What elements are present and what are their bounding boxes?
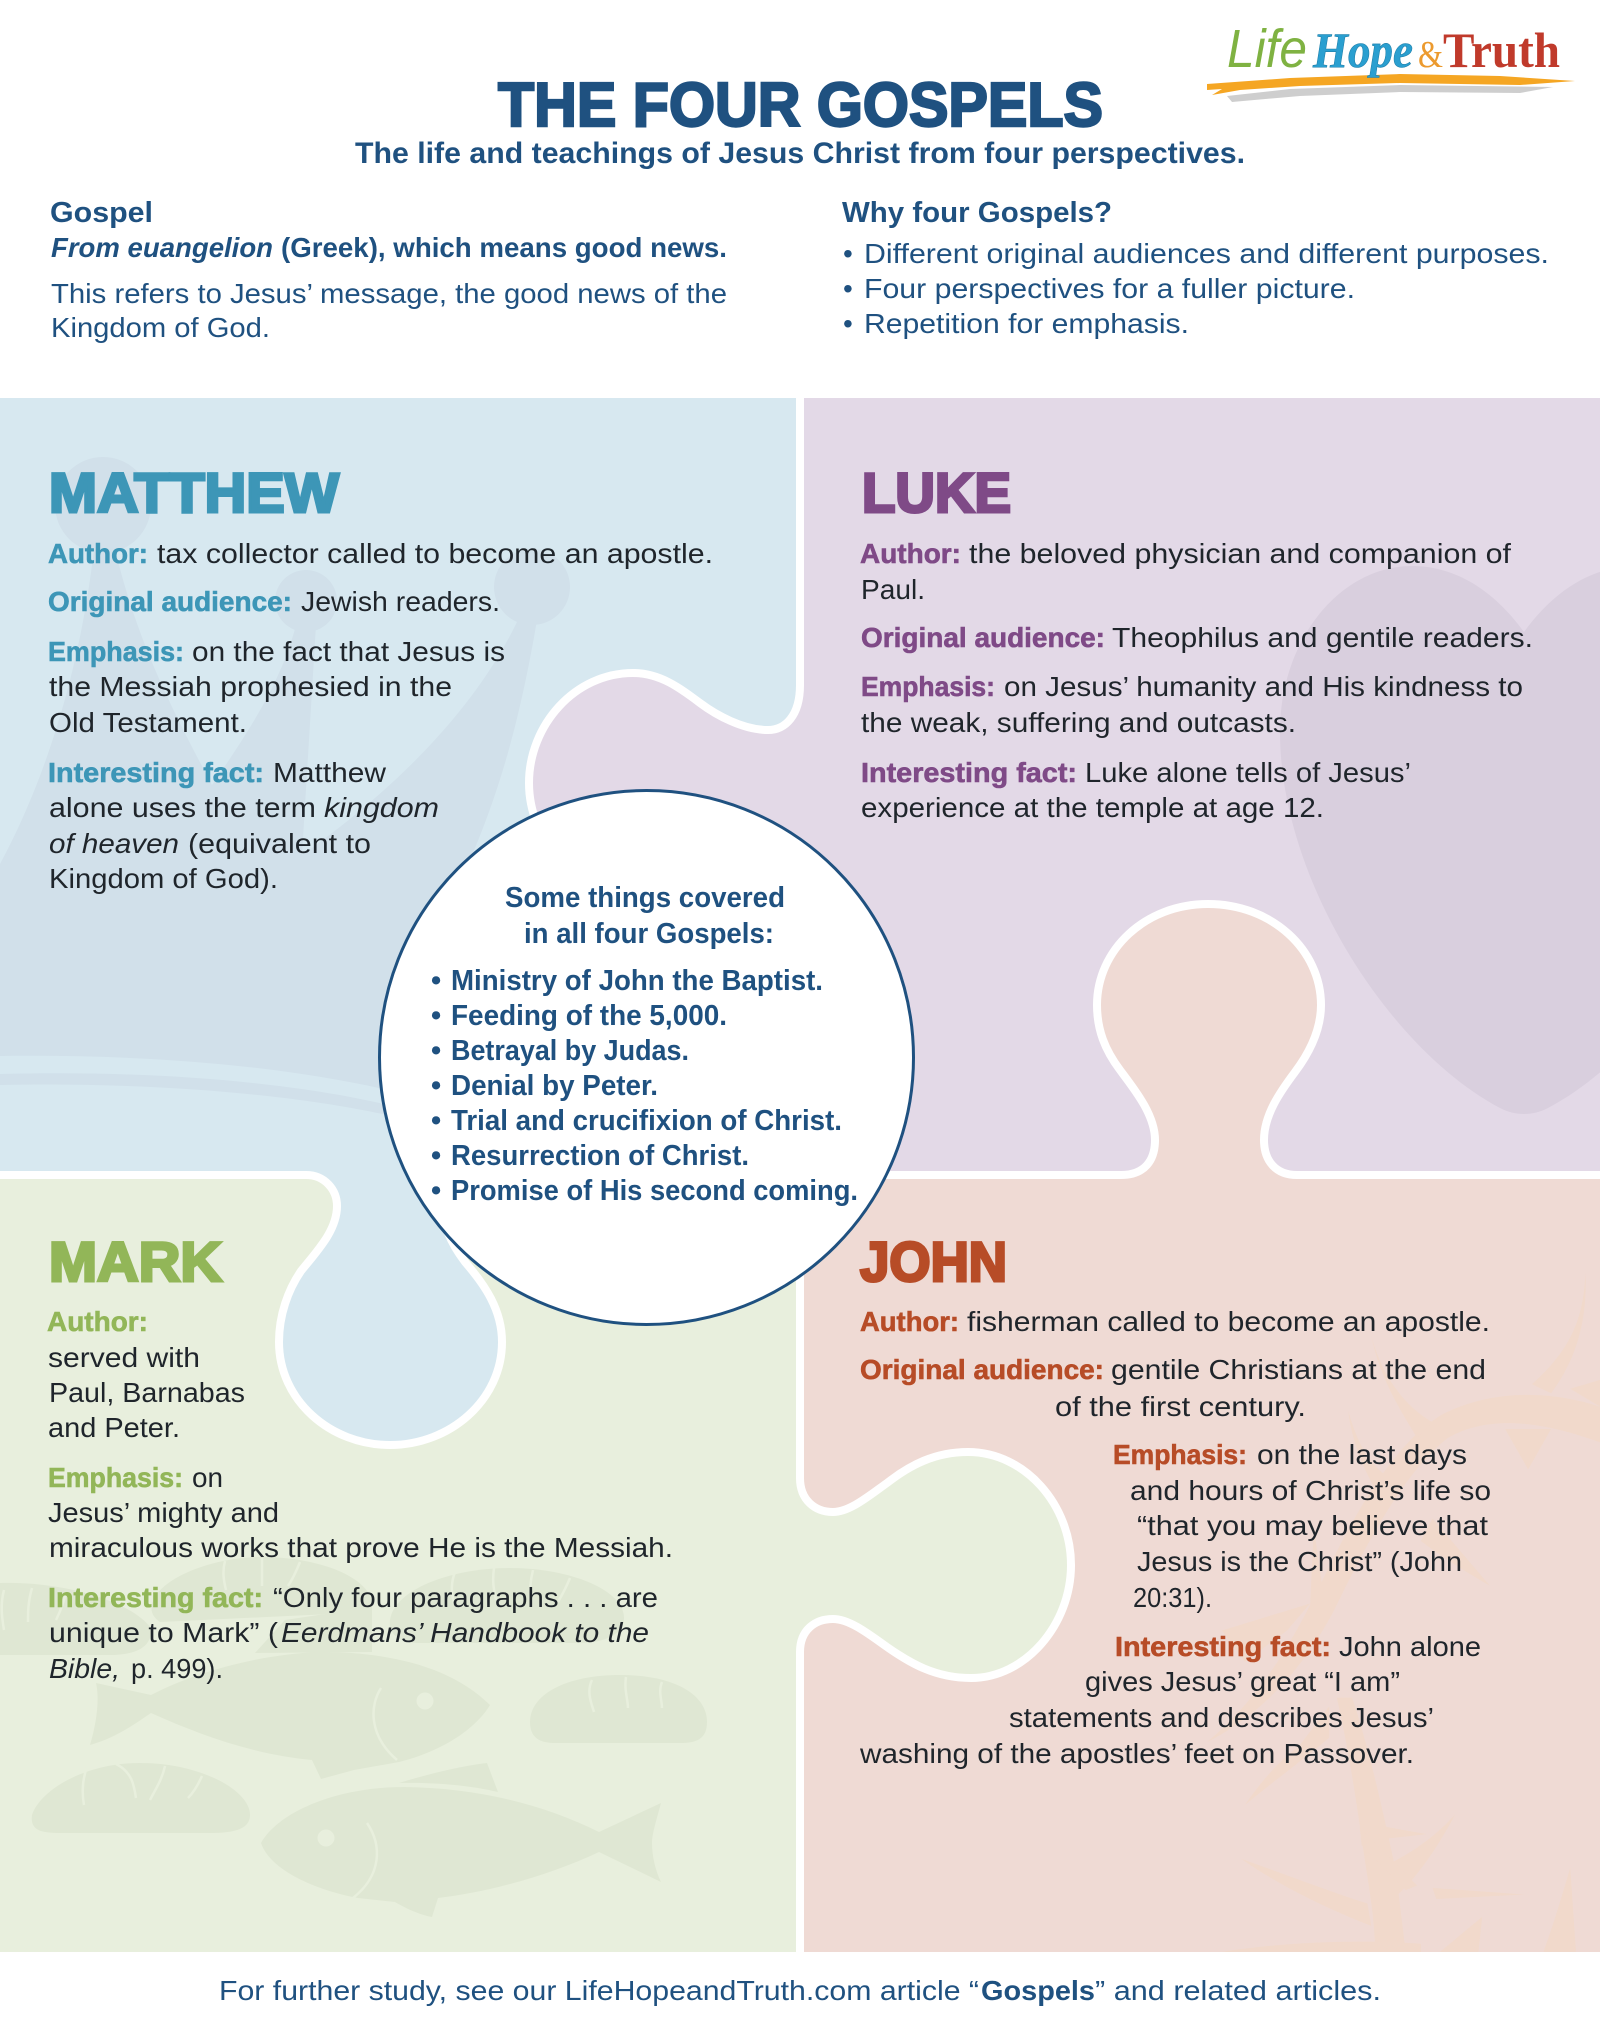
puzzle tab: Mark into John [800, 1452, 1071, 1678]
text: John: Author: [860, 1306, 959, 1337]
text: John: of the first century. [1055, 1391, 1306, 1422]
text: Matthew: Original audience: [48, 586, 292, 617]
text: Matthew: alone uses the term [49, 792, 316, 823]
text: John: 20:31). [1133, 1582, 1212, 1613]
center circle: things covered in all four Gospels: Feeding of the 5,000. [451, 1000, 727, 1032]
text: Mark: served with [48, 1342, 200, 1373]
text: Mark: Interesting fact: [48, 1582, 263, 1613]
text: Matthew: Matthew [273, 757, 387, 788]
footer: Gospels [981, 1975, 1095, 2006]
center circle: things covered in all four Gospels: • [431, 1070, 441, 1102]
text: Mark: “Only four paragraphs . . . are [273, 1582, 658, 1613]
center circle: things covered in all four Gospels: • [431, 1105, 441, 1137]
text: Matthew [48, 461, 713, 894]
center circle: things covered in all four Gospels: • [431, 965, 441, 997]
text: John: statements and describes Jesus’ [1009, 1702, 1434, 1733]
text block: Why four Gospels: • [843, 273, 853, 304]
text: Matthew: Jewish readers. [301, 586, 500, 617]
text: Matthew: Interesting fact: [48, 757, 264, 788]
text: Mark: unique to Mark” ( [49, 1617, 279, 1648]
text: Mark: and Peter. [48, 1412, 180, 1443]
text block: Why four Gospels: • [843, 308, 853, 339]
text block: Gospel definition: Gospel [50, 197, 153, 229]
text: John: washing of the apostles’ feet on Passover. [859, 1738, 1414, 1769]
text: Matthew: kingdom [324, 792, 439, 823]
icon: bread far left [0, 1583, 151, 1655]
text: Luke: Interesting fact: [861, 757, 1077, 788]
text: John: gives Jesus’ great “I am” [1085, 1666, 1400, 1697]
title: THE FOUR GOSPELS [498, 71, 1103, 140]
text block: Why four Gospels: Different original audiences and different purposes. [864, 238, 1549, 269]
heading: John: JOHN [860, 1230, 1007, 1293]
text block: Why four Gospels: Four perspectives for a fuller picture. [864, 273, 1355, 304]
icon: bread lower left [32, 1763, 250, 1833]
heading: Mark: MARK [49, 1230, 222, 1293]
text: Mark: Paul, Barnabas [49, 1377, 245, 1408]
text: Matthew: Old Testament. [49, 707, 247, 738]
text: John: Original audience: [860, 1354, 1104, 1385]
text block: Why four Gospels: • [843, 238, 853, 269]
text block: Why four Gospels: Repetition for emphasis. [864, 308, 1189, 339]
icon: fish upper [90, 1607, 490, 1779]
panel: Matthew background with crown [0, 398, 800, 1175]
center circle: things covered in all four Gospels: • [431, 1175, 441, 1207]
puzzle tab: John into Luke [1097, 904, 1321, 1176]
text: John: fisherman called to become an apostle. [967, 1306, 1490, 1337]
text: Mark: p. 499). [131, 1653, 223, 1684]
panel: Luke background with heart [800, 398, 1600, 1175]
text: John: Jesus is the Christ” (John [1137, 1546, 1462, 1577]
text: Luke: the weak, suffering and outcasts. [861, 707, 1296, 738]
logo: Life Hope & Truth: Hope [1312, 22, 1413, 78]
text: John: “that you may believe that [1137, 1510, 1488, 1541]
center circle: things covered in all four Gospels: Ministry of John the Baptist. [451, 965, 823, 997]
text: Mark: Bible, [49, 1653, 120, 1684]
text: Luke: Luke alone tells of Jesus’ [1085, 757, 1411, 788]
text block: Gospel definition: (Greek), which means good news. [281, 232, 727, 263]
text: Luke: the beloved physician and companion of [969, 538, 1511, 569]
icon: bread upper [390, 1568, 624, 1643]
footer: ” and related articles. [1095, 1975, 1381, 2006]
text: Mark: Emphasis: [48, 1462, 183, 1493]
text: Luke: Theophilus and gentile readers. [1112, 622, 1533, 653]
text block: Why four Gospels [842, 197, 1549, 339]
text: Luke: experience at the temple at age 12. [861, 792, 1324, 823]
text: Mark: Author: [47, 1306, 148, 1337]
footer [219, 1975, 1381, 2006]
text block: Why four Gospels: Why four Gospels? [842, 197, 1112, 229]
center circle: things covered in all four Gospels: Some things covered [505, 882, 785, 914]
text: Mark: on [192, 1462, 223, 1493]
center circle: things covered in all four Gospels: • [431, 1000, 441, 1032]
center circle: things covered in all four Gospels: Resurrection of Christ. [451, 1140, 749, 1172]
text: Luke: Emphasis: [861, 671, 995, 702]
text: John: on the last days [1257, 1439, 1467, 1470]
panel: John background with crown of thorns [800, 1175, 1600, 1952]
text: John: John alone [1339, 1631, 1481, 1662]
text: Luke: Original audience: [861, 622, 1105, 653]
text: John: Interesting fact: [1115, 1631, 1331, 1662]
text: Mark [47, 1230, 673, 1684]
icon: fish lower [261, 1763, 661, 1917]
text: Luke [860, 461, 1533, 823]
text: Mark: Eerdmans’ Handbook to the [281, 1617, 649, 1648]
subtitle: The life and teachings of Jesus Christ from four perspectives. [355, 137, 1245, 170]
text: Luke: on Jesus’ humanity and His kindness to [1004, 671, 1523, 702]
text: Matthew: (equivalent to [188, 828, 371, 859]
footer: For further study, see our LifeHopeandTruth.com article “ [219, 1975, 979, 2006]
text: Mark: miraculous works that prove He is the Messiah. [49, 1532, 673, 1563]
heading: Matthew: MATTHEW [49, 461, 339, 524]
text: Luke: Paul. [861, 574, 925, 605]
center circle: things covered in all four Gospels: • [431, 1035, 441, 1067]
text: Matthew: the Messiah prophesied in the [49, 671, 452, 702]
logo: Life Hope & Truth: Life [1227, 19, 1307, 79]
center circle: things covered in all four Gospels: Betrayal by Judas. [451, 1035, 689, 1067]
text: John: and hours of Christ’s life so [1130, 1475, 1491, 1506]
text: Matthew: tax collector called to become an apostle. [157, 538, 713, 569]
icon: bread middle [151, 1557, 372, 1622]
logo: Life Hope & Truth: Truth [1443, 22, 1560, 78]
center circle: things covered in all four Gospels: Trial and crucifixion of Christ. [451, 1105, 842, 1137]
puzzle tab: Matthew into Mark [279, 1174, 502, 1445]
heading: Luke: LUKE [862, 461, 1011, 524]
center circle: things covered in all four Gospels: Promise of His second coming. [451, 1175, 858, 1207]
center circle: things covered in all four Gospels: in all four Gospels: [524, 918, 774, 950]
text: Luke: Author: [860, 538, 961, 569]
center circle: things covered in all four Gospels: Denial by Peter. [451, 1070, 658, 1102]
text block: Gospel definition [50, 197, 727, 343]
text block: Gospel definition: Kingdom of God. [51, 312, 270, 343]
text: John [859, 1230, 1491, 1769]
text block: Gospel definition: From euangelion [51, 232, 273, 263]
text block: Gospel definition: This refers to Jesus’ message, the good news of the [51, 278, 727, 309]
puzzle tab: Luke into Matthew [529, 673, 800, 893]
text: Matthew: Author: [48, 538, 148, 569]
text: John: Emphasis: [1113, 1439, 1247, 1470]
text: John: gentile Christians at the end [1111, 1354, 1486, 1385]
panel: Mark background with fish and loaves [0, 1175, 800, 1952]
text: Matthew: of heaven [49, 828, 179, 859]
center circle: things covered in all four Gospels [380, 790, 914, 1324]
text: Matthew: Emphasis: [48, 636, 184, 667]
text: Matthew: on the fact that Jesus is [192, 636, 505, 667]
text: Matthew: Kingdom of God). [49, 863, 278, 894]
logo: Life Hope & Truth [1207, 19, 1575, 102]
text: Mark: Jesus’ mighty and [48, 1497, 279, 1528]
icon: bread right [530, 1675, 707, 1743]
center circle: things covered in all four Gospels: • [431, 1140, 441, 1172]
logo: Life Hope & Truth: & [1418, 34, 1443, 76]
